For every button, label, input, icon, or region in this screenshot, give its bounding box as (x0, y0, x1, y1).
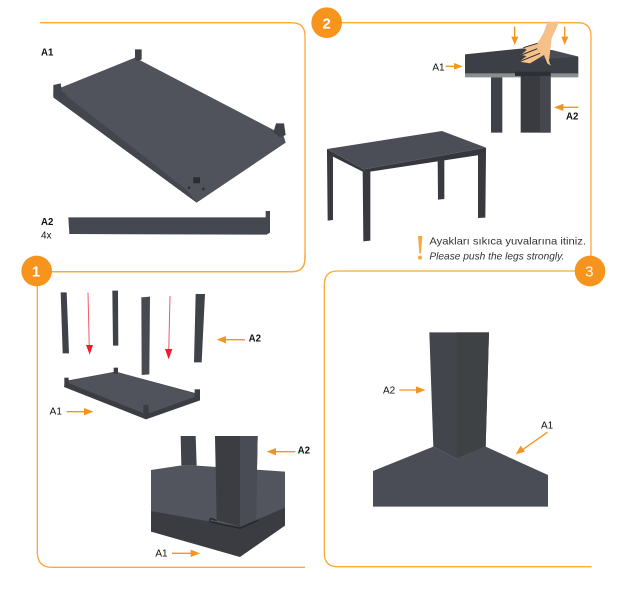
table top A1 (53, 49, 286, 203)
callout: A1: A1 (432, 62, 445, 73)
falling legs A2 (61, 291, 205, 375)
close-up: leg in table corner (151, 436, 285, 557)
callout: A2: A2 (383, 386, 396, 397)
panel: step 3 (324, 256, 605, 567)
callout: A1 (432, 62, 463, 73)
callout: A1: A1 (50, 406, 62, 417)
callout: A2 (554, 104, 578, 123)
callout: A2 close-up: A2 (298, 446, 310, 457)
panel: parts list (40, 23, 305, 272)
close-up: pressing table top (465, 48, 578, 133)
warning text: Ayakları sıkıca yuvalarına itiniz. (429, 236, 586, 247)
callout: A1 close-up (155, 549, 200, 560)
panel border: step 3 (324, 271, 592, 567)
panel: step 1 (21, 255, 310, 567)
leg A2 (68, 211, 270, 235)
step number badge 2 (311, 7, 342, 38)
callout: A1: A1 (541, 421, 554, 432)
step number badge 2: 2 (322, 16, 331, 33)
callout: A2: A2 (249, 334, 261, 345)
callout: A1 close-up: A1 (155, 549, 168, 560)
callout: A1 (516, 421, 554, 454)
callout: A2 (383, 386, 425, 397)
warning text: Please push the legs strongly. (429, 252, 564, 263)
callout: A2 close-up (267, 446, 310, 457)
panel: step 2 (311, 7, 591, 263)
red arrows: insert legs (86, 293, 172, 359)
panel border: step 1 (37, 255, 305, 567)
icon: exclamation mark (418, 236, 422, 260)
step number badge 3: 3 (585, 264, 594, 281)
assembled table (327, 131, 486, 241)
panel border: parts list (40, 23, 305, 272)
label: A2 parts: A2 (41, 217, 53, 228)
label: A1 parts: A1 (41, 48, 54, 59)
callout: A1 (50, 406, 93, 417)
table top with pegs (64, 368, 200, 419)
step number badge 1 (21, 256, 52, 286)
icon: hand pressing (519, 22, 559, 66)
step number badge 3 (575, 256, 605, 286)
label: quantity 4x: 4x (41, 231, 52, 242)
panel border: step 2 (342, 23, 591, 257)
callout: A2: A2 (566, 112, 578, 123)
arrows: press down (511, 27, 568, 45)
warning text (429, 236, 586, 263)
close-up: finished joint (373, 332, 548, 507)
callout: A2 (217, 334, 261, 345)
step number badge 1: 1 (32, 264, 40, 281)
